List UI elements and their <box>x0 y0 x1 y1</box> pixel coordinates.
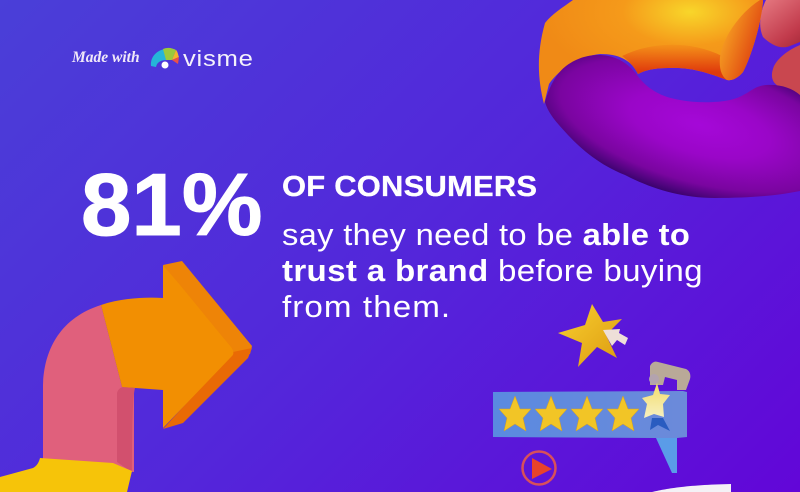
torus shape top right <box>539 0 800 198</box>
white shape bottom edge <box>652 484 731 492</box>
subheading: OF CONSUMERS <box>282 171 537 203</box>
body text: say they need to be able to <box>282 217 690 252</box>
body text: from them. <box>282 289 451 324</box>
logo text: Made with: Made with <box>72 49 140 66</box>
arrow yellow base <box>0 458 132 492</box>
orange torus segment <box>539 0 763 104</box>
gold star <box>558 304 622 367</box>
box tail <box>656 438 677 473</box>
body text: trust a brand before buying <box>282 253 703 288</box>
play icon <box>522 452 556 484</box>
arrow orange front <box>101 265 233 428</box>
arrow pink stem <box>43 305 134 472</box>
logo mark <box>151 48 179 68</box>
big stat 81%: 81% <box>81 155 262 254</box>
cursor <box>603 329 628 346</box>
arrow orange side faces <box>163 261 252 354</box>
purple torus segment <box>545 55 800 198</box>
five stars <box>499 396 639 431</box>
logo text: visme: visme <box>183 46 254 71</box>
box face <box>493 391 687 438</box>
arrow bottom left <box>0 261 252 492</box>
star with cursor <box>558 304 628 367</box>
orange torus end cap <box>720 0 763 80</box>
pink torus segment <box>760 0 800 47</box>
rating speech box <box>493 362 690 473</box>
lifted star <box>642 383 670 418</box>
robot arm <box>649 362 690 390</box>
body text <box>282 217 703 324</box>
shadow star <box>650 418 670 431</box>
